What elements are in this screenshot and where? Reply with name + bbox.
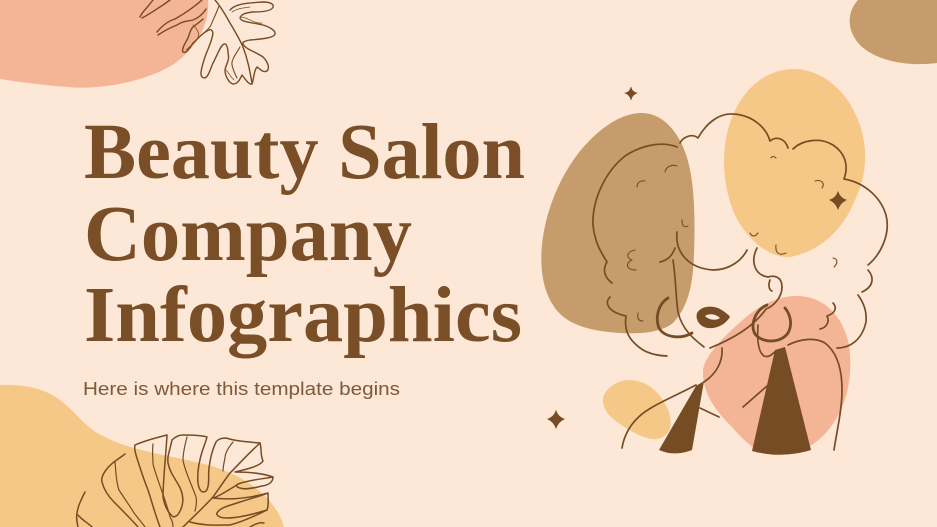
triangle: large dark dress	[752, 347, 811, 455]
icon: sparkle on yellow blob	[830, 192, 846, 209]
icon: small sparkle top	[625, 87, 637, 100]
title: Infographics	[84, 272, 522, 359]
icon: monstera leaf outline	[77, 435, 273, 527]
illustration: woman with curly hair	[541, 69, 887, 455]
blob: small yellow shape	[603, 380, 671, 439]
blob: top-left pink	[0, 0, 208, 88]
icon: oak leaf outline	[140, 0, 275, 84]
icon: lips	[697, 307, 730, 328]
blob: pink dress shape	[703, 296, 850, 455]
icon: sparkle bottom left	[548, 411, 564, 428]
subtitle: Here is where this template begins	[83, 379, 400, 399]
triangle: small dark dress	[659, 381, 704, 453]
earring: right hoop	[753, 305, 791, 341]
blob: yellow hair shape	[724, 69, 865, 257]
earring: left hoop	[657, 298, 692, 337]
title: Beauty Salon	[84, 109, 525, 196]
blob: tan hair shape	[541, 113, 694, 333]
blob: top-right tan	[850, 0, 937, 64]
blob: bottom-left yellow	[0, 385, 284, 527]
title	[84, 109, 525, 359]
line art: hair and body	[593, 114, 887, 450]
title: Company	[84, 191, 412, 278]
